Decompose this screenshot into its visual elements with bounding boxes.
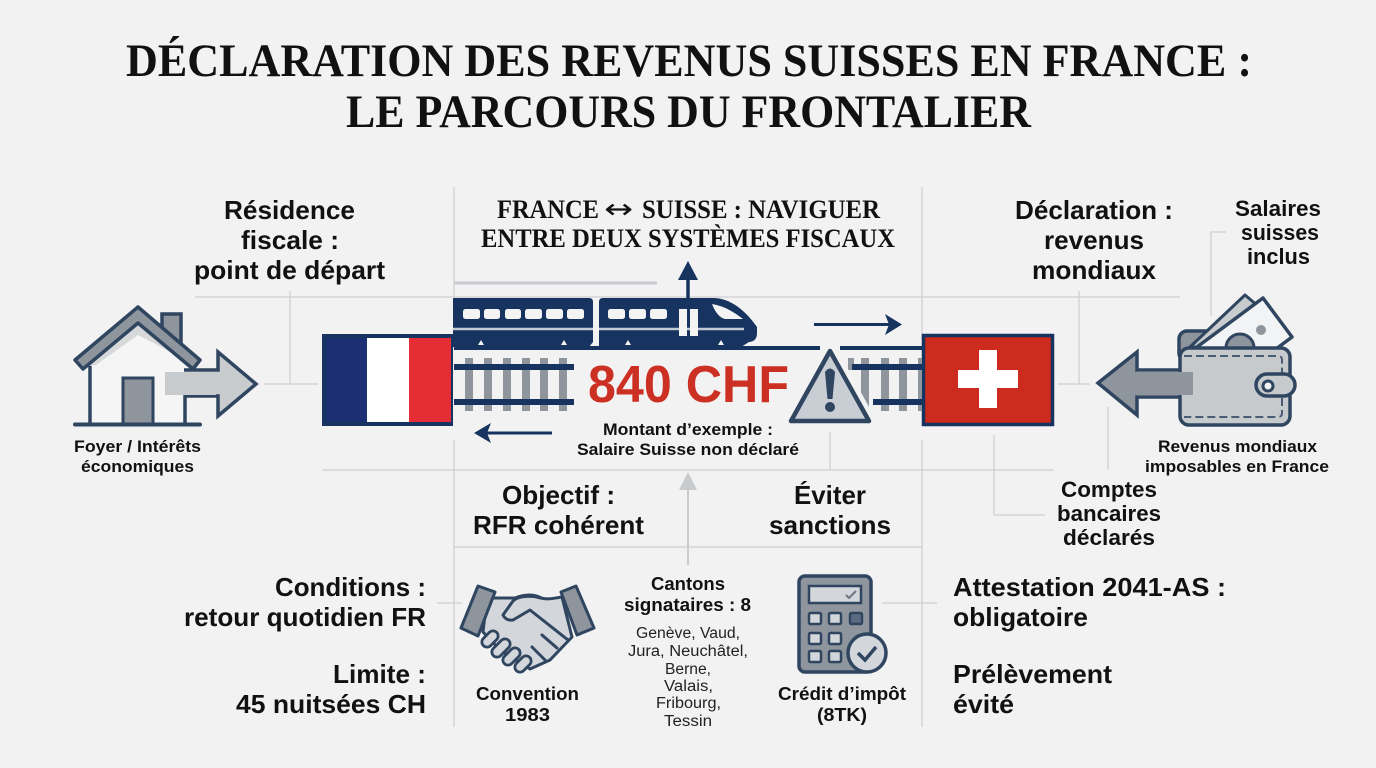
heading: résidence fiscale: fiscale :: [241, 225, 339, 255]
text: cantons signataires: signataires : 8: [624, 595, 751, 615]
label: foyer: [74, 437, 201, 476]
label: foyer: économiques: [81, 457, 194, 476]
label: revenus mondiaux imposables: imposables en France: [1145, 457, 1329, 476]
label: convention 1983: [476, 684, 579, 725]
title: LE PARCOURS DU FRONTALIER: [346, 86, 1032, 138]
heading: éviter sanctions: sanctions: [769, 510, 891, 540]
heading: éviter sanctions: Éviter: [794, 480, 866, 510]
icon: train: [453, 298, 757, 347]
heading: déclaration revenus mondiaux: Déclaration :: [1015, 195, 1173, 225]
label: revenus mondiaux imposables: Revenus mondiaux: [1158, 437, 1318, 456]
label: comptes bancaires: déclarés: [1063, 525, 1155, 550]
title: [126, 35, 1252, 138]
subtitle: France Suisse: ↔: [604, 194, 633, 225]
amount: 840 CHF: 840 CHF: [588, 356, 789, 414]
heading: objectif RFR: [473, 480, 644, 540]
text: attestation et prélèvement: [953, 572, 1226, 719]
label: comptes bancaires: [1057, 477, 1161, 550]
text: cantons signataires: Valais,: [664, 678, 713, 695]
text: cantons signataires: Jura, Neuchâtel,: [628, 643, 748, 660]
label: salaires suisses inclus: suisses: [1241, 220, 1319, 245]
subtitle: France Suisse: ENTRE DEUX SYSTÈMES FISCAUX: [481, 224, 895, 253]
label: crédit d'impôt: Crédit d’impôt: [778, 684, 906, 704]
title: DÉCLARATION DES REVENUS SUISSES EN FRANCE :: [126, 35, 1252, 87]
icon: handshake: [461, 586, 594, 669]
text: conditions et limite: [184, 572, 426, 719]
label: convention 1983: Convention: [476, 684, 579, 704]
label: salaires suisses inclus: Salaires: [1235, 196, 1321, 221]
heading: résidence fiscale: Résidence: [224, 195, 355, 225]
text: attestation et prélèvement: obligatoire: [953, 602, 1088, 632]
grey speed line: [454, 282, 657, 284]
heading: objectif RFR: Objectif :: [502, 480, 615, 510]
icon: house with arrow: [75, 307, 256, 424]
icon: warning triangle: [790, 349, 870, 421]
label: crédit d'impôt: (8TK): [817, 705, 867, 725]
caption: montant d'exemple: Montant d’exemple :: [603, 421, 773, 439]
arrow: up from train: [678, 261, 698, 298]
heading: résidence fiscale: point de départ: [194, 255, 385, 285]
label: foyer: Foyer / Intérêts: [74, 437, 201, 456]
Swiss flag: [924, 336, 1052, 424]
text: attestation et prélèvement: évité: [953, 689, 1014, 719]
label: comptes bancaires: Comptes: [1061, 477, 1157, 502]
text: cantons signataires: Berne,: [665, 661, 711, 678]
caption: montant d'exemple: Salaire Suisse non déclaré: [577, 441, 799, 459]
heading: objectif RFR: RFR cohérent: [473, 510, 644, 540]
icon: calculator with check: [799, 576, 886, 672]
text: conditions et limite: Conditions :: [275, 572, 426, 602]
arrow: left: [474, 423, 552, 443]
railway tracks: [454, 348, 922, 411]
subtitle: France Suisse: FRANCE: [497, 195, 599, 224]
arrow: grey up: [679, 472, 697, 565]
text: conditions et limite: Limite :: [333, 659, 426, 689]
label: revenus mondiaux imposables: [1145, 437, 1329, 476]
label: crédit d'impôt: [778, 684, 906, 725]
text: conditions et limite: retour quotidien FR: [184, 602, 426, 632]
text: attestation et prélèvement: Prélèvement: [953, 659, 1112, 689]
heading: résidence fiscale: [194, 195, 385, 285]
heading: déclaration revenus mondiaux: mondiaux: [1032, 255, 1157, 285]
label: salaires suisses inclus: inclus: [1247, 244, 1310, 269]
text: cantons signataires: Genève, Vaud,: [636, 625, 740, 642]
label: comptes bancaires: bancaires: [1057, 501, 1161, 526]
heading: déclaration revenus mondiaux: [1015, 195, 1173, 285]
heading: éviter sanctions: [769, 480, 891, 540]
icon: wallet with money and arrow: [1098, 295, 1295, 425]
arrow: right: [814, 314, 902, 335]
label: salaires suisses inclus: [1235, 196, 1321, 269]
text: cantons signataires: Tessin: [664, 713, 712, 730]
caption: montant d'exemple: [577, 421, 799, 459]
text: conditions et limite: 45 nuitsées CH: [236, 689, 426, 719]
text: cantons signataires: Cantons: [651, 574, 725, 594]
text: cantons signataires: Fribourg,: [656, 695, 721, 712]
subtitle: France Suisse: [481, 194, 895, 253]
label: convention 1983: 1983: [505, 705, 550, 725]
text: cantons signataires: [624, 574, 751, 730]
subtitle: France Suisse: SUISSE : NAVIGUER: [642, 195, 880, 224]
heading: déclaration revenus mondiaux: revenus: [1044, 225, 1144, 255]
French flag: [322, 334, 453, 426]
text: attestation et prélèvement: Attestation 2041-AS :: [953, 572, 1226, 602]
